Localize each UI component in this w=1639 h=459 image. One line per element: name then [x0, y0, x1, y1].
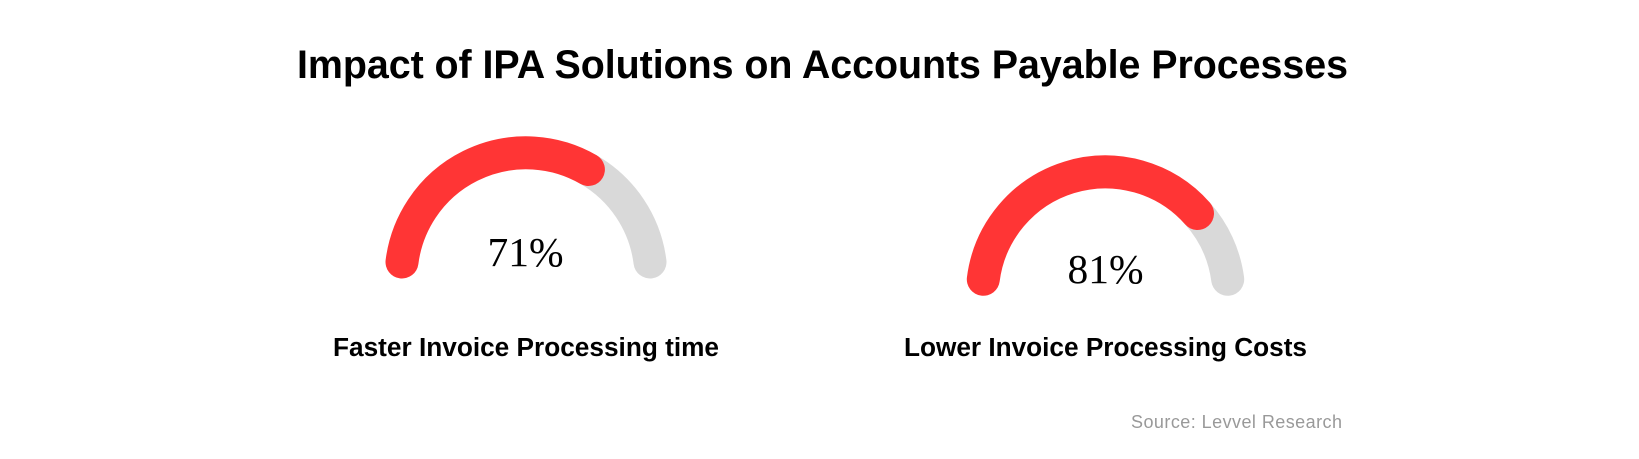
gauge value 71%	[402, 153, 588, 262]
label: faster invoice processing time: Faster Invoice Processing time	[333, 332, 719, 362]
value 81%: 81%	[1067, 246, 1144, 292]
title: Impact of IPA Solutions on Accounts Payable Processes	[297, 43, 1348, 87]
gauge track 81%	[1198, 214, 1228, 279]
gauge value 81%	[983, 172, 1198, 279]
chart: gauge 81%	[983, 172, 1228, 292]
source: Source: Levvel Research	[1131, 412, 1342, 432]
value 71%: 71%	[487, 229, 564, 275]
chart: gauge 71%	[402, 153, 650, 275]
label: lower invoice processing costs: Lower Invoice Processing Costs	[904, 332, 1307, 362]
gauge track 71%	[588, 170, 650, 262]
